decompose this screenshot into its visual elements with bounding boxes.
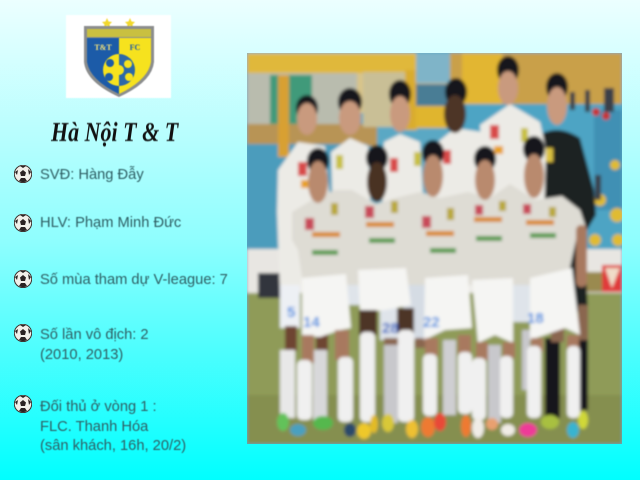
text: stadium: SVĐ: Hàng Đẫy (40, 167, 144, 183)
boots (277, 413, 289, 431)
front row arms and heads (576, 225, 587, 287)
numbers: 14 (303, 314, 320, 331)
text: round 1 opponent: (sân khách, 16h, 20/2) (40, 438, 186, 454)
numbers: 22 (423, 314, 440, 331)
numbers (287, 304, 544, 337)
grass (247, 293, 622, 444)
icon: football (14, 214, 32, 232)
goalkeeper (535, 130, 596, 320)
text: round 1 opponent: Đối thủ ở vòng 1 : (40, 399, 157, 415)
numbers: 28 (382, 320, 399, 337)
title: Hà Nội T & T (51, 117, 178, 147)
icon: football (14, 395, 32, 413)
team photo (247, 53, 622, 444)
team logo: FC (130, 43, 141, 52)
front row sponsor marks (312, 217, 554, 237)
front row shorts (302, 274, 351, 337)
back row shorts and legs (280, 285, 300, 328)
icon: football (14, 165, 32, 183)
numbers: 18 (527, 310, 544, 327)
team logo (66, 15, 172, 98)
text: seasons in V-league: Số mùa tham dự V-league: 7 (40, 272, 228, 288)
back row jerseys (277, 104, 546, 300)
team logo: T&T (94, 43, 112, 52)
text: championships: Số lần vô địch: 2 (40, 327, 149, 343)
front row jerseys (292, 184, 586, 285)
icon: football (14, 270, 32, 288)
icon: football (14, 324, 32, 342)
numbers: 5 (287, 304, 295, 321)
text: round 1 opponent (40, 398, 186, 454)
front row legs (302, 308, 579, 363)
back row heads (296, 56, 568, 121)
text: championships: (2010, 2013) (40, 346, 123, 362)
text: round 1 opponent: FLC. Thanh Hóa (40, 418, 148, 434)
text: coach: HLV: Phạm Minh Đức (40, 215, 181, 231)
text: championships (40, 326, 149, 363)
